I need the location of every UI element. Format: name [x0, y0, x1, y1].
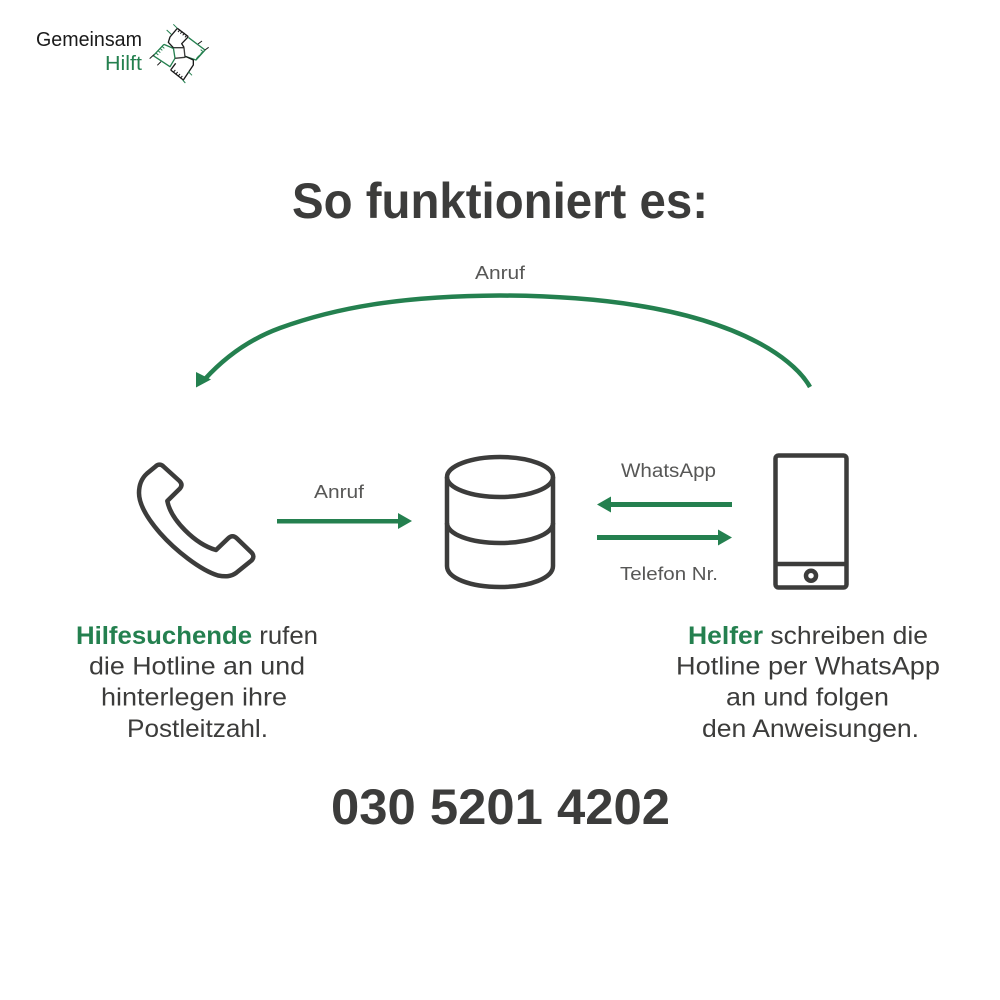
arrow: curved return arrow from smartphone to telephone	[196, 296, 810, 388]
text block: helpers: den Anweisungen.	[702, 715, 919, 743]
text block: help seekers: die Hotline an und	[89, 652, 305, 680]
text block: help seekers: Hilfesuchende rufen	[76, 622, 318, 650]
text block: helpers: an und folgen	[726, 684, 889, 712]
arrow: phone number to helper	[597, 530, 732, 546]
hotline phone number: 030 5201 4202	[331, 779, 670, 835]
label: Telefon Nr.: Telefon Nr.	[620, 564, 718, 584]
label: Anruf: Anruf	[314, 482, 365, 502]
text block: helpers: Helfer schreiben die	[688, 622, 928, 650]
arrow: call to hotline	[277, 513, 412, 529]
text block: helpers	[676, 622, 940, 743]
logo wordmark: Hilft: Hilft	[105, 53, 142, 75]
text block: helpers: Hotline per WhatsApp	[676, 652, 940, 680]
icon: database	[447, 457, 553, 587]
logo wordmark: Gemeinsam: Gemeinsam	[36, 29, 142, 51]
label: WhatsApp: WhatsApp	[621, 461, 716, 482]
title: So funktioniert es:	[292, 173, 708, 229]
text block: help seekers: Postleitzahl.	[127, 715, 268, 743]
top arrow label: Anruf: Anruf	[475, 263, 526, 283]
logo	[36, 24, 209, 83]
icon: smartphone	[776, 456, 846, 588]
arrow: WhatsApp to hotline	[597, 496, 732, 512]
logo icon: four interlocking hands	[150, 24, 209, 83]
icon: telephone handset	[139, 465, 253, 576]
text block: help seekers: hinterlegen ihre	[101, 684, 287, 712]
text block: help seekers	[76, 622, 318, 743]
